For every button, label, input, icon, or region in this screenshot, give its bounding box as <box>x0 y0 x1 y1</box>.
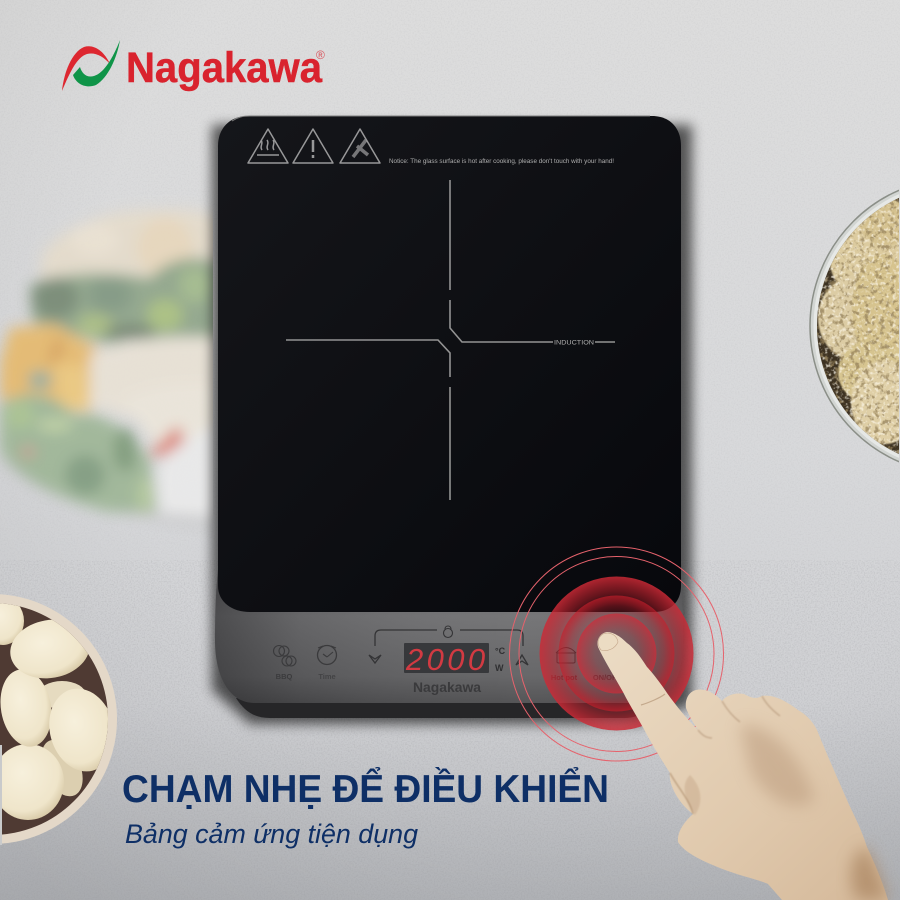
panel control: Time <box>318 646 336 681</box>
bowl rim <box>810 178 900 474</box>
bowl rim <box>0 594 117 844</box>
greens <box>0 394 157 512</box>
panel control: Time: Time <box>318 672 336 681</box>
panel control: Hot pot: Hot pot <box>551 673 578 682</box>
logo mark: red swoosh <box>62 46 110 91</box>
red pepper <box>150 425 186 458</box>
logo wordmark: Nagakawa <box>126 44 323 92</box>
unit labels <box>495 646 506 673</box>
blurred food plate on the left <box>0 209 220 524</box>
white cut <box>157 425 220 512</box>
notice text: Notice: The glass surface is hot after cooking, please don't touch with your hand! <box>389 159 614 165</box>
garlic cloves <box>0 603 108 820</box>
subheading: Bảng cảm ứng tiện dụng <box>125 819 418 849</box>
logo mark: green swoosh <box>73 40 120 86</box>
registered mark: ® <box>316 48 325 62</box>
icon: warning <box>293 129 333 163</box>
panel control: ON/OFF: ON/OFF <box>593 673 622 682</box>
unit labels: °C <box>495 646 506 656</box>
hand silhouette <box>597 632 888 900</box>
touch ripple rings <box>510 547 724 761</box>
induction cooktop <box>215 116 683 718</box>
beige grains <box>40 209 220 290</box>
lock bracket <box>375 630 523 646</box>
panel control: BBQ: BBQ <box>276 672 292 681</box>
unit labels: W <box>495 663 504 673</box>
touch ripple filled circles <box>540 576 694 730</box>
outer ring <box>510 547 724 761</box>
fingernail <box>598 633 618 651</box>
panel control: Hot pot <box>551 648 578 682</box>
LED display: 2000 <box>405 642 489 677</box>
warning icons <box>248 129 380 163</box>
bowl interior <box>0 603 108 835</box>
control panel body <box>215 570 683 703</box>
bowl of garlic on the lower left <box>0 594 124 845</box>
brand on panel: Nagakawa <box>413 679 481 695</box>
hand shading <box>740 725 815 806</box>
panel control: BBQ <box>274 646 296 681</box>
white fish <box>80 328 213 416</box>
hand pressing the button <box>597 632 888 900</box>
arrow: down <box>369 655 381 663</box>
cooking zone cross <box>286 180 615 500</box>
logo: Nagakawa <box>62 40 325 92</box>
finger creases between knuckles <box>698 696 780 738</box>
grains fill <box>817 198 899 454</box>
cooktop shadow <box>212 125 692 724</box>
INDUCTION label: INDUCTION <box>554 340 594 346</box>
inner ring <box>519 556 714 752</box>
plate <box>0 457 220 524</box>
broccoli <box>30 258 220 345</box>
icon: hot surface <box>248 129 288 163</box>
icon: lock <box>444 626 452 638</box>
finger knuckle crease <box>641 694 665 705</box>
mango pieces <box>0 324 100 410</box>
heading: CHẠM NHẸ ĐỂ ĐIỀU KHIỂN <box>122 766 609 811</box>
glass top <box>218 116 681 612</box>
arrow: up <box>516 655 528 665</box>
icon: do not touch <box>340 129 380 163</box>
bowl of grains on the right <box>809 190 899 462</box>
base <box>236 695 665 718</box>
